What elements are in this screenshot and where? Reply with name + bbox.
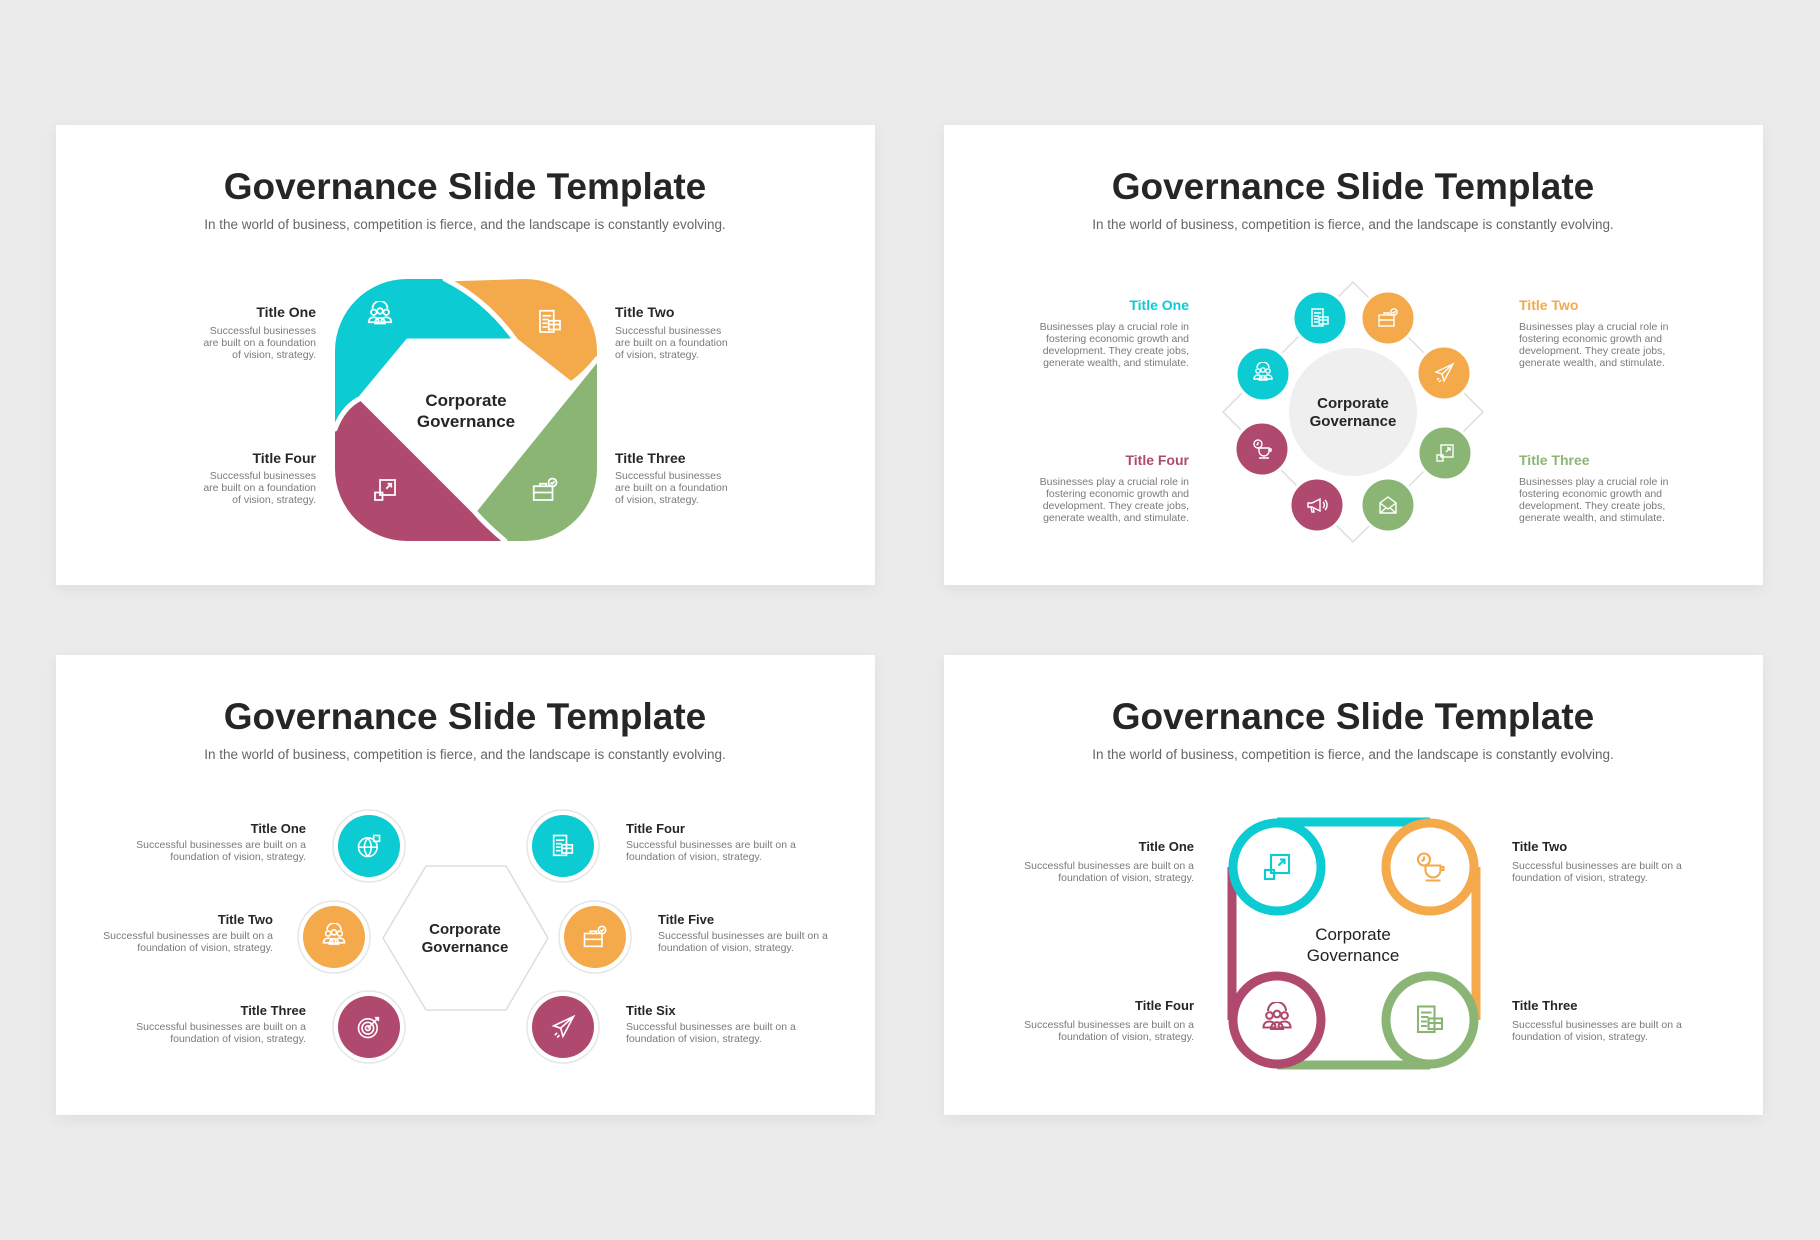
text: title four: development. They create jobs, [1043, 500, 1189, 512]
text: title six: Successful businesses are built on a [626, 1021, 796, 1033]
text: title three: of vision, strategy. [615, 494, 699, 506]
text: title four [1040, 452, 1190, 524]
text: title three: foundation of vision, strategy. [1512, 1031, 1648, 1043]
title: Governance Slide Template [224, 166, 706, 207]
text: title two: foundation of vision, strategy. [137, 942, 273, 954]
text: title four: Title Four [1125, 452, 1190, 468]
text: title two: Successful businesses [615, 325, 721, 337]
text: title three: Title Three [1519, 452, 1590, 468]
node: green mail [1361, 478, 1415, 532]
text: title one: of vision, strategy. [232, 349, 316, 361]
text: title four: Successful businesses are built on a [1024, 1019, 1194, 1031]
text: title one: foundation of vision, strategy. [170, 851, 306, 863]
text: title four: foundation of vision, strategy. [1058, 1031, 1194, 1043]
text: title two: Title Two [1519, 297, 1578, 313]
text: title five: foundation of vision, strategy. [658, 942, 794, 954]
petal: green [474, 359, 602, 546]
text: title four: Successful businesses are built on a [626, 839, 796, 851]
text: title one: Successful businesses are built on a [136, 839, 306, 851]
text: title four [626, 821, 796, 863]
text: title two: Successful businesses are built on a [103, 930, 273, 942]
text: title three [136, 1003, 306, 1045]
text: title two: Title Two [1512, 839, 1567, 854]
text: title three: generate wealth, and stimulate. [1519, 512, 1665, 524]
text: title two [103, 912, 273, 954]
text: title one [1040, 297, 1189, 369]
node: orange plane [1417, 346, 1471, 400]
diamond chart: Governance [1310, 413, 1396, 430]
text: title three: Successful businesses are built on a [1512, 1019, 1682, 1031]
text: title two: Title Two [615, 304, 674, 320]
panel: hexagon diagram [56, 655, 875, 1115]
text: title two: foundation of vision, strategy. [1512, 872, 1648, 884]
text: title three: fostering economic growth and [1519, 488, 1662, 500]
text: title three: Successful businesses [615, 470, 721, 482]
subtitle: In the world of business, competition is fierce, and the landscape is constantly evolving. [204, 217, 726, 232]
text: title six: foundation of vision, strategy. [626, 1033, 762, 1045]
icon: briefcase [534, 478, 556, 500]
text: title three: Title Three [1512, 998, 1578, 1013]
text: title four: Title Four [626, 821, 685, 836]
text: title two [615, 304, 728, 361]
text: title five: Successful businesses are built on a [658, 930, 828, 942]
node: cyan doc [527, 810, 599, 882]
text: title two [1519, 297, 1669, 369]
text: title one: fostering economic growth and [1046, 333, 1189, 345]
petal: orange [445, 274, 602, 384]
text: title three: foundation of vision, strategy. [170, 1033, 306, 1045]
text: title one: Title One [1129, 297, 1189, 313]
ring: green doc [1386, 976, 1474, 1064]
title: Governance Slide Template [1112, 696, 1594, 737]
text: title one: Title One [1139, 839, 1194, 854]
petal: cyan [335, 279, 511, 422]
text: title three: Businesses play a crucial role in [1519, 476, 1669, 488]
panel: petal diagram [56, 125, 875, 585]
text: title three: Successful businesses are built on a [136, 1021, 306, 1033]
text: title four: of vision, strategy. [232, 494, 316, 506]
ring frame chart [1232, 822, 1476, 1065]
ring: orange cup [1386, 823, 1474, 911]
text: title two: of vision, strategy. [615, 349, 699, 361]
text: title one: development. They create jobs, [1043, 345, 1189, 357]
text: title two: generate wealth, and stimulate. [1519, 357, 1665, 369]
panel: ring square diagram [944, 655, 1763, 1115]
diamond chart [1223, 282, 1483, 542]
petal chart [330, 274, 602, 546]
subtitle: In the world of business, competition is fierce, and the landscape is constantly evolving. [1092, 747, 1614, 762]
node: cyan people [1236, 347, 1290, 401]
ring frame chart: Corporate [1315, 925, 1391, 944]
node: pink target [333, 991, 405, 1063]
text: title four: generate wealth, and stimulate. [1043, 512, 1189, 524]
text: title two: fostering economic growth and [1519, 333, 1662, 345]
text: title five [658, 912, 828, 954]
text: title one [203, 304, 316, 361]
node: cyan globe [333, 810, 405, 882]
hexagon chart [298, 810, 631, 1063]
title: Governance Slide Template [224, 696, 706, 737]
text: title six: Title Six [626, 1003, 676, 1018]
node: green resize [1418, 426, 1472, 480]
text: title one: Businesses play a crucial role in [1040, 321, 1189, 333]
text: title one: Successful businesses are built on a [1024, 860, 1194, 872]
subtitle: In the world of business, competition is fierce, and the landscape is constantly evolving. [204, 747, 726, 762]
text: title four [203, 450, 317, 506]
diamond chart: Corporate [1317, 395, 1389, 412]
text: title four: Businesses play a crucial role in [1040, 476, 1189, 488]
text: title two: Successful businesses are built on a [1512, 860, 1682, 872]
text: title three: Title Three [240, 1003, 306, 1018]
ring: cyan resize [1233, 823, 1321, 911]
text: title one: Successful businesses [210, 325, 316, 337]
petal: pink [330, 398, 505, 546]
panel: diamond circle diagram [944, 125, 1763, 585]
title: Governance Slide Template [1112, 166, 1594, 207]
icon: people [369, 301, 391, 324]
text: title three: Title Three [615, 450, 686, 466]
text: title two: Title Two [218, 912, 273, 927]
text: title one [1024, 839, 1194, 884]
text: title one: generate wealth, and stimulate. [1043, 357, 1189, 369]
text: title three: development. They create jobs, [1519, 500, 1665, 512]
text: title four [1024, 998, 1194, 1043]
text: title two [1512, 839, 1682, 884]
node: orange case [559, 901, 631, 973]
text: title three: are built on a foundation [615, 482, 728, 494]
icon: resize [375, 480, 395, 500]
node: pink cup [1235, 422, 1289, 476]
subtitle: In the world of business, competition is fierce, and the landscape is constantly evolving. [1092, 217, 1614, 232]
text: title six [626, 1003, 796, 1045]
hexagon chart: Corporate [429, 921, 501, 938]
text: title four: foundation of vision, strategy. [626, 851, 762, 863]
text: title three [1519, 452, 1669, 524]
text: title four: are built on a foundation [203, 482, 316, 494]
node: orange case [1361, 291, 1415, 345]
hexagon chart: Governance [422, 939, 508, 956]
text: title four: Title Four [252, 450, 317, 466]
node: cyan doc [1293, 291, 1347, 345]
text: title three [1512, 998, 1682, 1043]
text: title one: foundation of vision, strategy. [1058, 872, 1194, 884]
petal chart: Governance [417, 412, 515, 431]
text: title five: Title Five [658, 912, 714, 927]
text: title one [136, 821, 306, 863]
text: title three [615, 450, 728, 506]
text: title one: are built on a foundation [203, 337, 316, 349]
text: title four: Title Four [1135, 998, 1194, 1013]
icon: document [540, 311, 560, 332]
text: title one: Title One [256, 304, 316, 320]
text: title two: development. They create jobs, [1519, 345, 1665, 357]
ring frame chart: Governance [1307, 946, 1399, 965]
text: title four: fostering economic growth and [1046, 488, 1189, 500]
text: title two: Businesses play a crucial role in [1519, 321, 1669, 333]
node: orange people [298, 901, 370, 973]
center label: Corporate [425, 391, 507, 410]
text: title four: Successful businesses [210, 470, 316, 482]
ring: pink people [1233, 976, 1321, 1064]
text: title two: are built on a foundation [615, 337, 728, 349]
node: pink plane [527, 991, 599, 1063]
text: title one: Title One [251, 821, 306, 836]
node: pink megaphone [1290, 478, 1344, 532]
